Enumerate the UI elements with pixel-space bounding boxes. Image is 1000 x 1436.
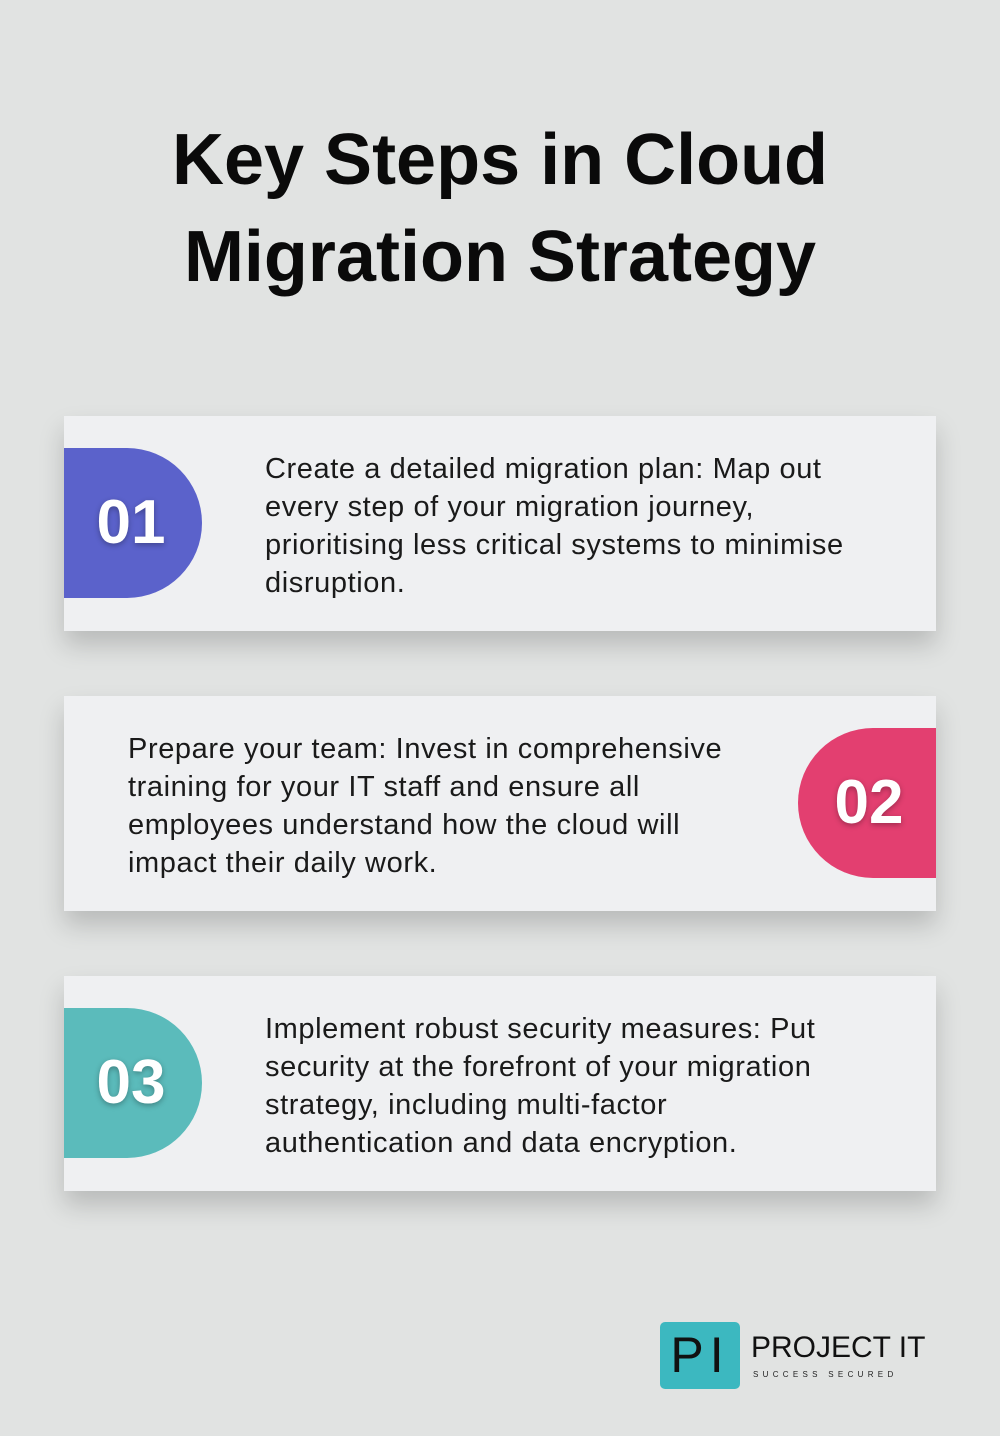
panel: step 2 [64,696,936,911]
logo text: PROJECT IT [751,1331,925,1364]
text step 3: security at the forefront of your migration [265,1051,811,1083]
text step 3: Implement robust security measures: Put [265,1013,815,1045]
text step 2: Prepare your team: Invest in comprehensive [128,733,722,765]
text step 2: employees understand how the cloud will [128,809,680,841]
title [172,120,828,297]
title: Key Steps in Cloud [172,120,828,200]
text step 1: every step of your migration journey, [265,491,754,523]
text step 1 [265,453,844,599]
text step 1: Create a detailed migration plan: Map out [265,453,822,485]
badge 03: 03 [97,1048,165,1117]
text step 3: authentication and data encryption. [265,1127,737,1159]
text step 2 [128,733,722,879]
text step 3: strategy, including multi-factor [265,1089,667,1121]
icon: PI box: PI [670,1327,730,1383]
badge 01: 01 [97,488,165,557]
badge 01 [64,448,202,598]
tagline: SUCCESS SECURED [753,1370,898,1379]
text step 2: training for your IT staff and ensure all [128,771,640,803]
text step 2: impact their daily work. [128,847,437,879]
title: Migration Strategy [184,217,816,297]
icon: PI box [660,1322,740,1389]
logo [660,1322,925,1389]
badge 03 [64,1008,202,1158]
text step 1: prioritising less critical systems to minimise [265,529,844,561]
badge 02 [798,728,936,878]
text step 1: disruption. [265,567,405,599]
badge 02: 02 [835,768,903,837]
panel: step 1 [64,416,936,631]
panel: step 3 [64,976,936,1191]
text step 3 [265,1013,815,1159]
